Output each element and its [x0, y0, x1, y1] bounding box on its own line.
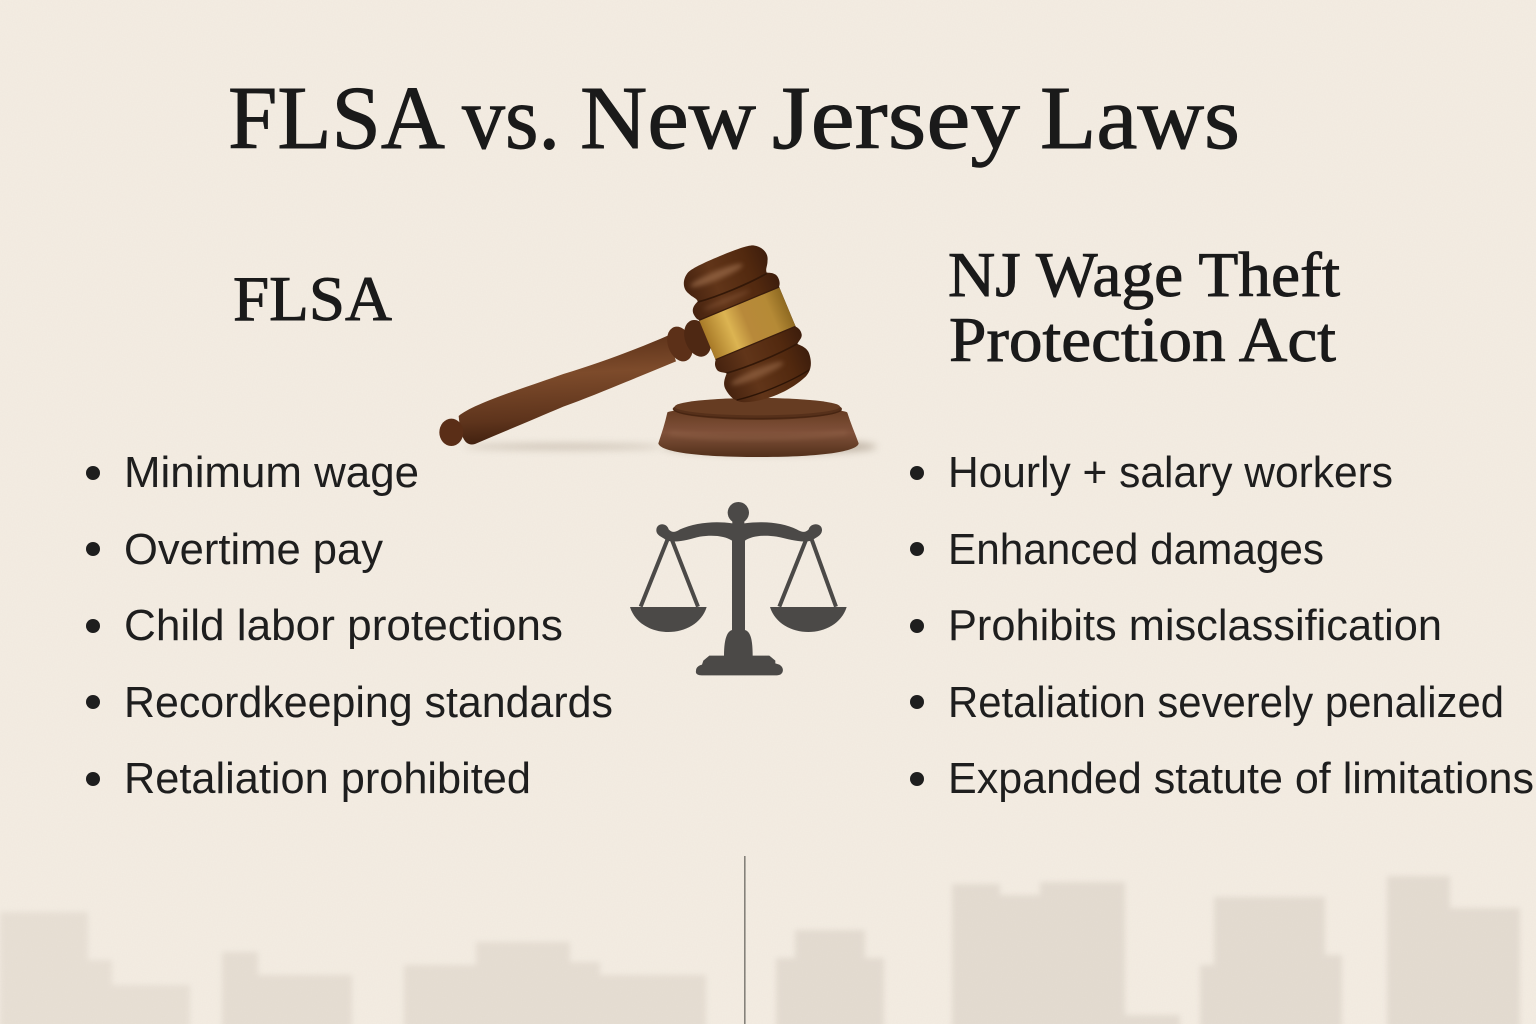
title: vs. — [462, 69, 560, 168]
panel: NJ Wage Theft Protection Act column — [910, 239, 1534, 803]
FLSA heading: FLSA — [233, 263, 392, 334]
sound block — [658, 398, 859, 457]
city skyline silhouette — [0, 876, 1520, 1024]
FLSA bullet list: Recordkeeping standards — [124, 678, 613, 727]
vertical divider line — [744, 856, 746, 1024]
NJ heading: Protection Act — [949, 304, 1336, 375]
FLSA bullet list: Retaliation prohibited — [124, 754, 531, 803]
FLSA bullet list — [86, 448, 613, 803]
panel: FLSA column — [86, 263, 613, 803]
title: FLSA — [228, 69, 445, 168]
title: Laws — [1040, 69, 1240, 168]
gavel collar — [663, 316, 716, 365]
gavel head — [677, 239, 820, 412]
NJ bullet list: Prohibits misclassification — [948, 601, 1442, 650]
icon: gavel and sound block — [439, 239, 877, 457]
title: New — [580, 69, 756, 168]
NJ heading: NJ Wage Theft — [948, 239, 1340, 310]
title: Jersey — [772, 69, 1020, 168]
NJ bullet list: Hourly + salary workers — [948, 448, 1393, 497]
NJ bullet list: Expanded statute of limitations — [948, 754, 1534, 803]
FLSA bullet list: Overtime pay — [124, 525, 383, 574]
title — [228, 69, 1240, 168]
NJ heading — [948, 239, 1340, 375]
FLSA bullet list: Minimum wage — [124, 448, 419, 497]
NJ bullet list: Enhanced damages — [948, 525, 1324, 574]
FLSA bullet list: Child labor protections — [124, 601, 563, 650]
icon: scales of justice — [630, 502, 847, 675]
NJ bullet list: Retaliation severely penalized — [948, 678, 1504, 727]
NJ bullet list — [910, 448, 1534, 803]
gavel handle — [459, 335, 676, 444]
